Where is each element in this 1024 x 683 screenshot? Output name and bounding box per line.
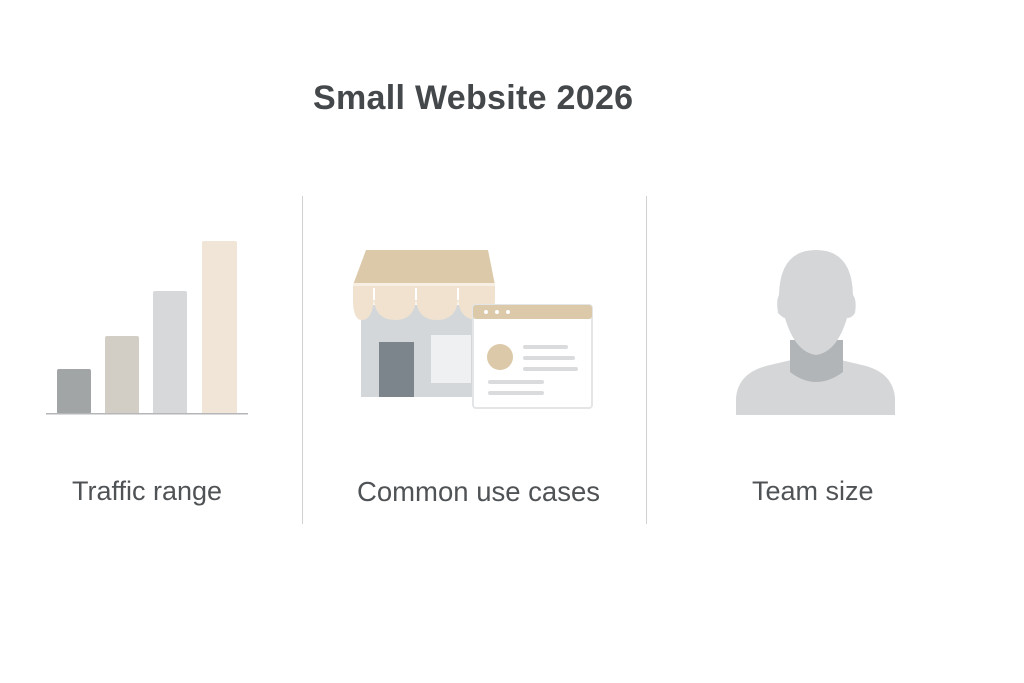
divider [302,196,303,524]
title: Small Website 2026 [313,79,633,117]
label: traffic range: Traffic range [72,476,222,506]
label: common use cases: Common use cases [357,476,600,507]
label: team size: Team size [752,476,874,506]
